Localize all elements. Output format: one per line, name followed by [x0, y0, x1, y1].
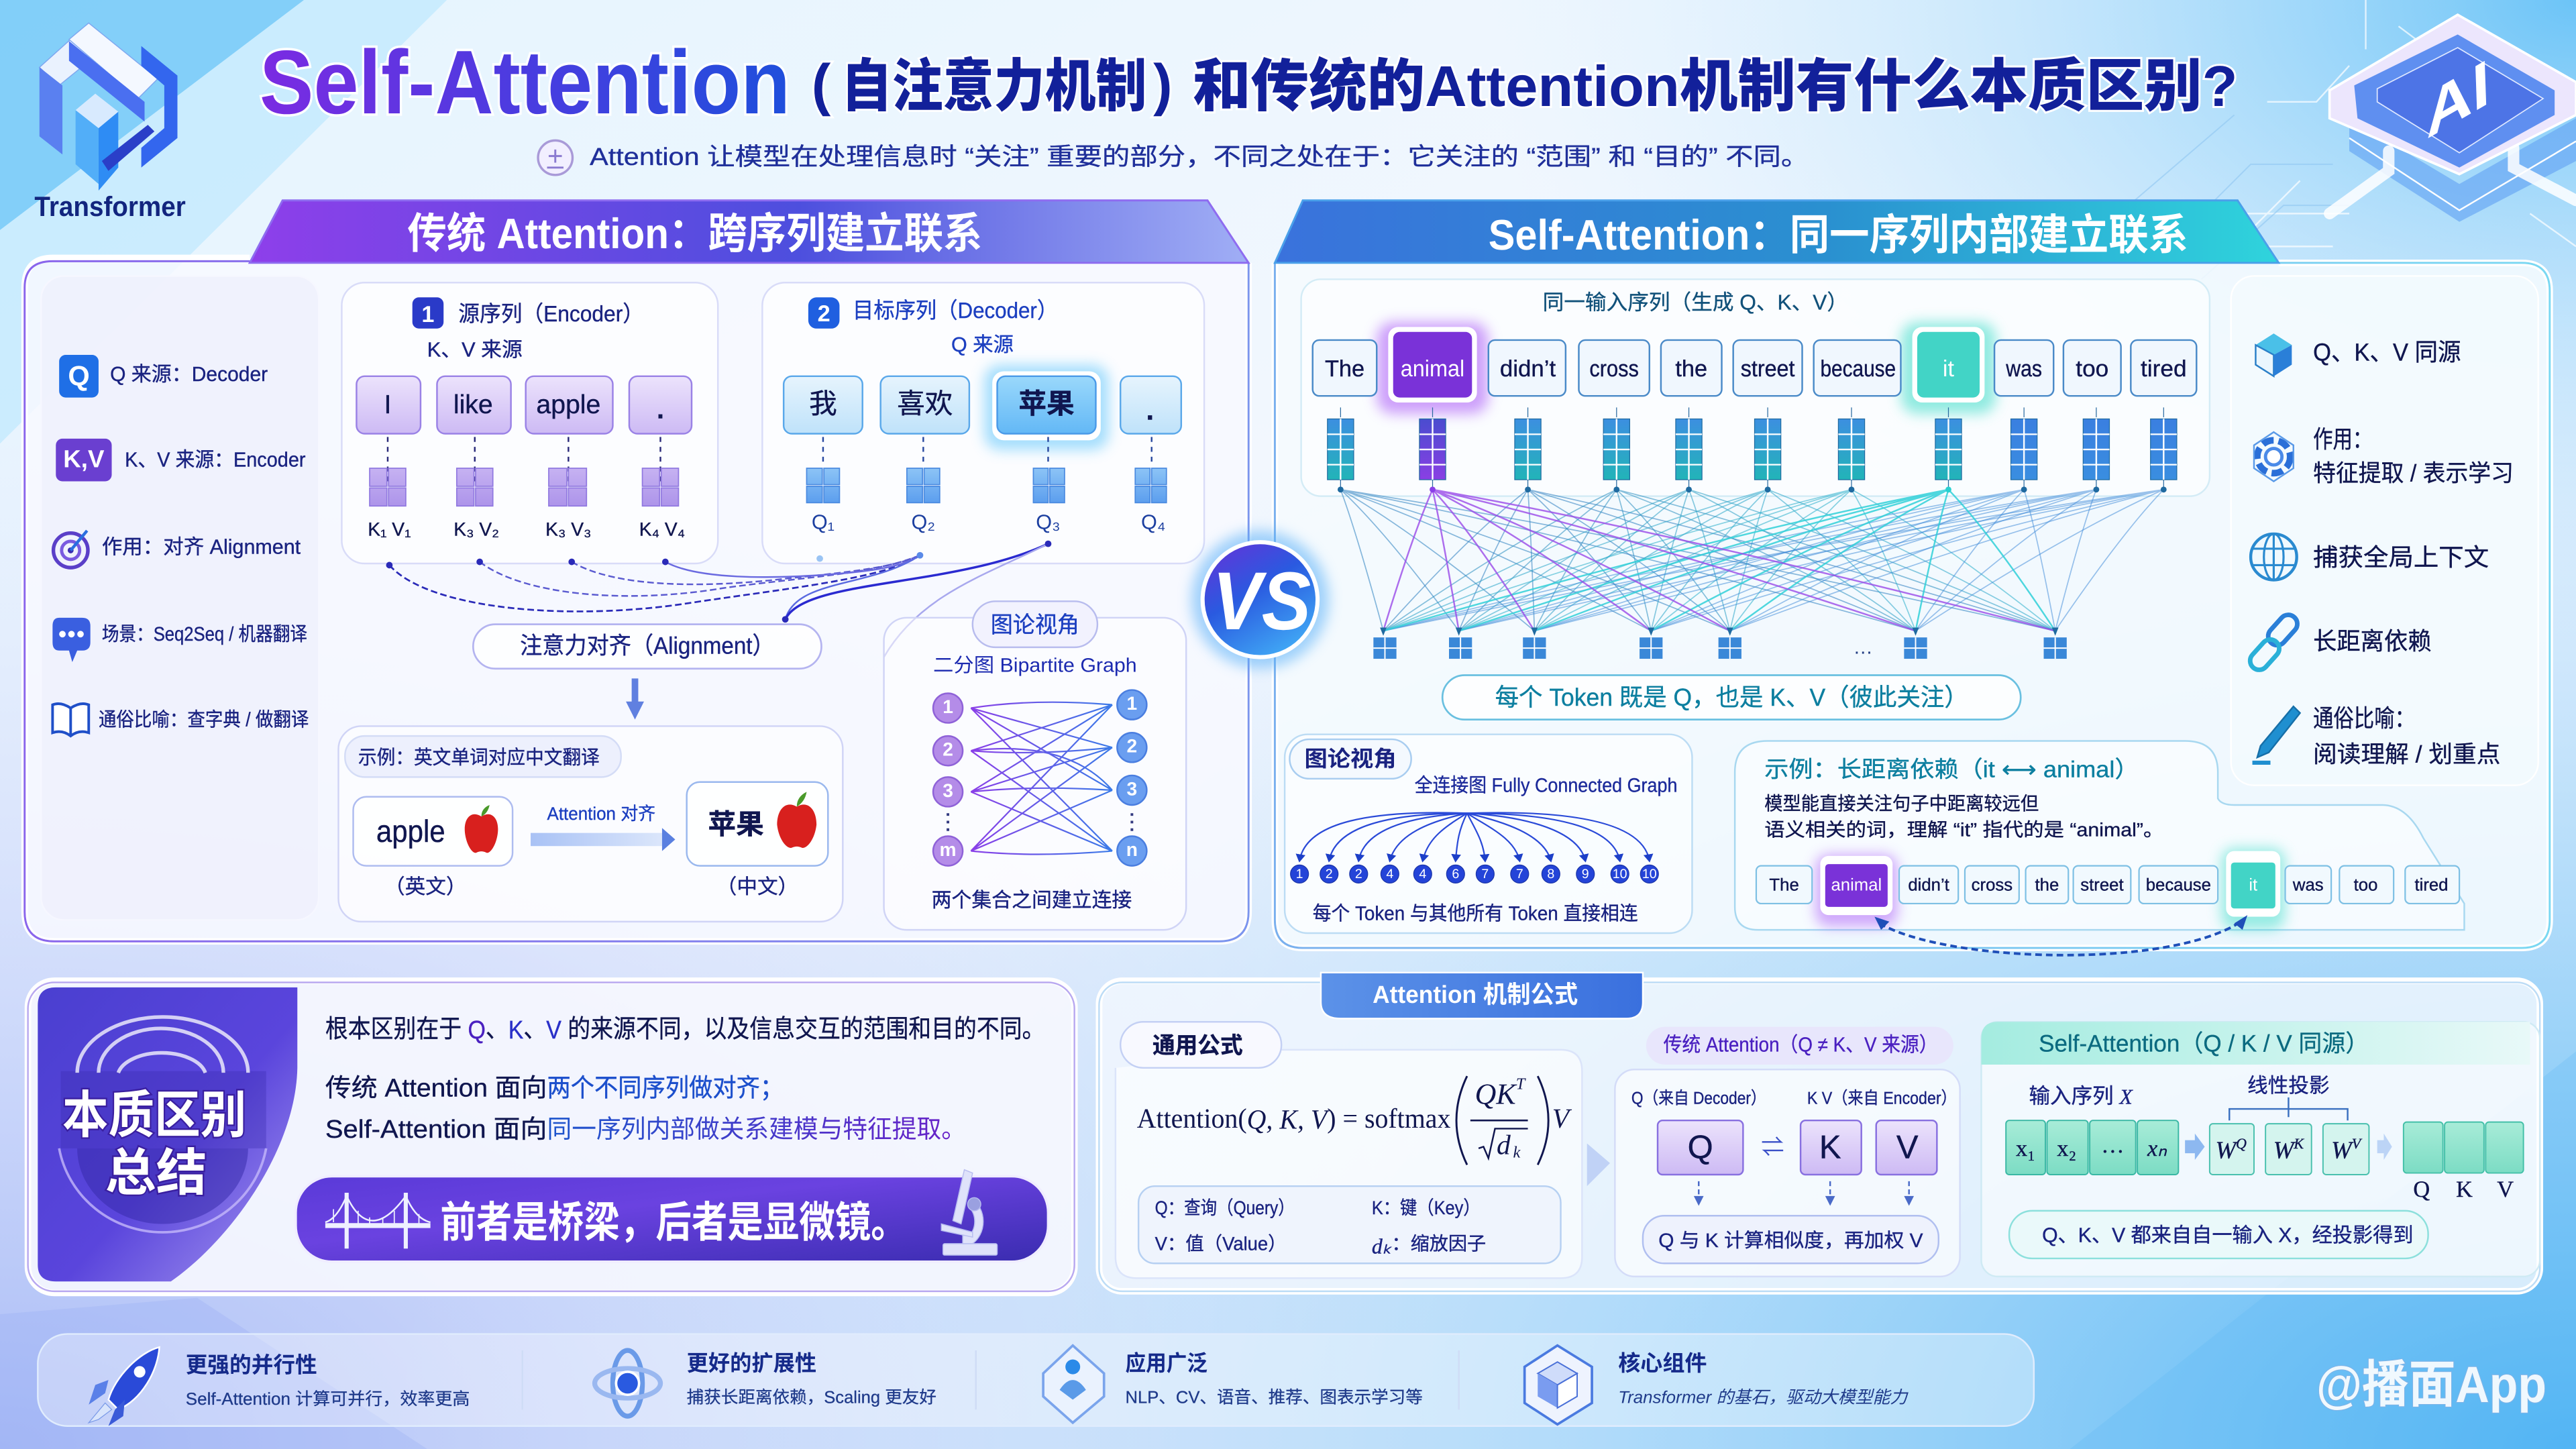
- right nodes: [1117, 690, 1146, 866]
- pill: every token: 每个 Token 既是 Q，也是 K、V（彼此关注）: [1495, 684, 1968, 712]
- target header: 目标序列（Decoder）: [853, 298, 1058, 323]
- source labels: [368, 521, 686, 541]
- banner: 前者是桥梁，后者是显微镜。: [440, 1197, 907, 1247]
- benefit: applications: [1043, 1346, 1424, 1423]
- left nodes: [933, 693, 963, 866]
- node labels: [940, 695, 1138, 861]
- numbered nodes: 7: [1516, 867, 1524, 881]
- sequence tokens: too: [2076, 355, 2109, 381]
- projection boxes: K: [2292, 1135, 2306, 1152]
- sequence tokens: The: [1325, 355, 1365, 381]
- source tokens: apple: [536, 392, 601, 420]
- target labels: Q₂: [911, 511, 936, 534]
- example tokens: The: [1769, 875, 1799, 896]
- pill: alignment: [473, 625, 821, 669]
- QKV boxes: [1658, 1120, 1937, 1175]
- arrow: formula to traditional: [1587, 1143, 1610, 1186]
- QKV boxes: ⇌: [1761, 1134, 1784, 1160]
- global context: 捕获全局上下文: [2313, 545, 2489, 572]
- sequence tokens: animal: [1401, 355, 1464, 381]
- QKV boxes: V: [1896, 1130, 1919, 1167]
- example captions: [384, 875, 798, 899]
- benefit: scalability: [595, 1350, 937, 1416]
- numbered nodes: 7: [1481, 867, 1490, 881]
- panel: fully connected graph: 全连接图 Fully Connected Graph: [1415, 773, 1677, 797]
- formula legend: Q：查询（Query）: [1155, 1197, 1295, 1219]
- source labels: K₃ V₂: [453, 521, 499, 541]
- tab: self-attention: Self-Attention：同一序列内部建立联系: [1489, 210, 2188, 260]
- panel: source sequence: [341, 282, 718, 564]
- panel: long-distance example: 示例：长距离依赖（it ⟷ animal）: [1764, 756, 2139, 782]
- source tokens: .: [657, 396, 664, 425]
- sequence tokens: cross: [1589, 355, 1639, 381]
- panel: long-distance example: 语义相关的词，理解 “it” 指代的是 “animal”。: [1764, 820, 2163, 841]
- example tokens: it: [2249, 875, 2257, 896]
- analogy: 阅读理解 / 划重点: [2313, 741, 2500, 769]
- source header: K、V 来源: [427, 338, 523, 362]
- tab: self-attention: [1275, 201, 2279, 263]
- formula legend: K：键（Key）: [1372, 1197, 1481, 1219]
- sequence tokens: street: [1741, 355, 1795, 381]
- attention arrow: [531, 804, 676, 851]
- node labels: 3: [1127, 780, 1137, 800]
- projection boxes: [2210, 1124, 2369, 1175]
- node labels: 2: [943, 741, 953, 761]
- node labels: n: [1126, 841, 1138, 861]
- role: 特征提取 / 表示学习: [2313, 460, 2514, 488]
- target tokens: 我: [809, 388, 837, 420]
- pill: graph view: [1289, 739, 1411, 779]
- dashed arrows: [1699, 1181, 1909, 1197]
- role: 作用：对齐 Alignment: [102, 535, 301, 559]
- KV source: [56, 439, 306, 482]
- panel: fully connected graph: [1285, 735, 1692, 933]
- formula legend: [1138, 1186, 1561, 1263]
- formula: V: [1552, 1103, 1574, 1134]
- source header: [413, 297, 644, 362]
- node labels: 3: [943, 782, 953, 802]
- panel: traditional formula: [1615, 1027, 1960, 1277]
- Q source: [59, 355, 268, 398]
- icon: AI chip: [2330, 15, 2576, 222]
- numbered nodes: 2: [1355, 867, 1363, 881]
- role: [54, 531, 301, 568]
- summary text: Self-Attention 面向: [325, 1115, 547, 1144]
- numbered nodes: 4: [1419, 867, 1428, 881]
- numbered nodes: [1291, 865, 1658, 883]
- tab: formula: Attention 机制公式: [1373, 981, 1578, 1010]
- watermark: @播面App: [2316, 1356, 2546, 1413]
- pill: general formula: [1120, 1022, 1281, 1068]
- arrow: alignment to example: [626, 678, 644, 720]
- node labels: 2: [1127, 738, 1137, 757]
- numbered nodes: 9: [1582, 867, 1590, 881]
- fully connected attention network: …: [1853, 636, 1873, 659]
- target tokens: [784, 365, 1181, 450]
- KV source: K、V 来源：Encoder: [125, 449, 306, 472]
- source header: 1: [421, 301, 435, 327]
- output boxes: [2404, 1122, 2524, 1203]
- panel: self-attention formula: 线性投影: [2247, 1075, 2330, 1097]
- target tokens: 苹果: [1018, 388, 1075, 420]
- pill: every token: [1442, 676, 2021, 720]
- Q source: Q: [68, 361, 90, 392]
- formula: QK: [1474, 1078, 1516, 1111]
- input boxes: xₙ: [2146, 1138, 2167, 1163]
- scenario: [52, 618, 307, 662]
- sequence tokens: was: [2004, 355, 2042, 381]
- pill: graph view: [973, 601, 1097, 647]
- summary text: 根本区别在于 Q、K、V 的来源不同，以及信息交互的范围和目的不同。: [325, 1014, 1045, 1044]
- example captions: （英文）: [384, 875, 467, 899]
- panel: traditional formula: Q（来自 Decoder）: [1631, 1089, 1766, 1109]
- numbered nodes: 2: [1326, 867, 1334, 881]
- pill: similarity: [1643, 1216, 1939, 1263]
- benefit: scalability: 捕获长距离依赖，Scaling 更友好: [687, 1388, 937, 1408]
- source tokens: I: [384, 392, 391, 420]
- benefit: parallel: Self-Attention 计算可并行，效率更高: [186, 1390, 470, 1409]
- target header: [808, 297, 1058, 356]
- input boxes: [2006, 1120, 2178, 1175]
- pill: alignment: 注意力对齐（Alignment）: [520, 633, 775, 660]
- target tokens: .: [1146, 395, 1154, 427]
- example tokens: tired: [2414, 875, 2449, 896]
- panel: self-attention: [1275, 201, 2550, 955]
- target labels: [812, 511, 1165, 534]
- output boxes: V: [2497, 1179, 2514, 1203]
- pill: traditional heading: [1646, 1027, 1953, 1065]
- KV source: K,V: [63, 446, 105, 474]
- panel: target sequence: [762, 282, 1204, 564]
- fully connected attention network: [1338, 486, 2167, 659]
- shield: summary label: [38, 987, 297, 1281]
- heading: self-attention: [1981, 1022, 2530, 1065]
- sequence tokens: [1313, 322, 2196, 414]
- output boxes: Q: [2413, 1179, 2430, 1203]
- sequence tokens: because: [1820, 355, 1896, 381]
- icon: hex cube: [1525, 1346, 1592, 1424]
- example tokens: too: [2354, 875, 2378, 896]
- token vectors: [1328, 407, 2177, 490]
- pill: same input: [2009, 1211, 2428, 1258]
- numbered nodes: 8: [1547, 867, 1556, 881]
- pill: graph view: 图论视角: [991, 611, 1079, 637]
- footer band: [38, 1334, 2034, 1426]
- pill: traditional heading: 传统 Attention（Q ≠ K、V 来源）: [1664, 1033, 1938, 1057]
- panel: input sequence: [1301, 279, 2210, 496]
- logo: Transformer: [34, 23, 186, 223]
- source labels: K₄ V₄: [639, 521, 686, 541]
- global context: [2251, 534, 2489, 580]
- title: 自注意力机制: [841, 55, 1146, 119]
- sequence tokens: didn’t: [1500, 355, 1556, 381]
- subtitle: Attention 让模型在处理信息时 “关注” 重要的部分，不同之处在于：它关注的 “范围” 和 “目的” 不同。: [590, 144, 1809, 172]
- arcs: [1299, 812, 1650, 861]
- summary text: 两个不同序列做对齐；: [547, 1073, 784, 1103]
- analogy: 通俗比喻：查字典 / 做翻译: [99, 708, 309, 731]
- projection boxes: Q: [2236, 1135, 2247, 1152]
- role: 作用：: [2313, 427, 2372, 454]
- icon: atom: [595, 1350, 660, 1416]
- QKV same source: Q、K、V 同源: [2313, 339, 2461, 367]
- target labels: Q₄: [1141, 511, 1165, 534]
- formula legend: dₖ：缩放因子: [1372, 1233, 1486, 1258]
- target header: 2: [818, 300, 830, 326]
- arrow: [2185, 1134, 2205, 1160]
- numbered nodes: 4: [1386, 867, 1395, 881]
- panel: general formula: [1116, 1022, 1582, 1278]
- bipartite edges: [971, 702, 1112, 854]
- VS badge: [1191, 531, 1329, 669]
- logo text: Transformer: [34, 191, 186, 223]
- source tokens: like: [453, 392, 493, 420]
- word apple: [354, 797, 513, 866]
- target labels: Q₁: [812, 511, 835, 534]
- example tokens: street: [2080, 875, 2124, 896]
- shield: summary label: 总结: [105, 1144, 207, 1201]
- input boxes: …: [2101, 1134, 2125, 1159]
- icon: rocket: [89, 1347, 160, 1426]
- formula: Attention(Q, K, V) = softmax: [1137, 1103, 1452, 1134]
- source tokens: [356, 376, 692, 434]
- analogy: [52, 704, 309, 736]
- banner: [296, 1170, 1048, 1262]
- summary text: 传统 Attention 面向: [325, 1073, 547, 1103]
- tab: traditional attention: [250, 201, 1248, 263]
- pill: same input: Q、K、V 都来自自一输入 X，经投影得到: [2042, 1224, 2414, 1247]
- numbered nodes: 10: [1642, 867, 1658, 881]
- long dependency: [2247, 611, 2431, 674]
- benefit: scalability: 更好的扩展性: [687, 1351, 817, 1376]
- panel: long-distance example: 模型能直接关注句子中距离较远但: [1764, 794, 2039, 815]
- panel: attention formula: [1099, 973, 2540, 1291]
- attention arrow: Attention 对齐: [547, 804, 655, 824]
- panel: fully connected graph: 每个 Token 与其他所有 Token 直接相连: [1313, 902, 1638, 925]
- source header: 源序列（Encoder）: [458, 301, 644, 326]
- numbered nodes: 10: [1613, 867, 1628, 881]
- target header: Q 来源: [951, 333, 1014, 356]
- analogy: [2253, 706, 2500, 769]
- input boxes: x₂: [2057, 1138, 2077, 1163]
- projection boxes: W: [2331, 1138, 2352, 1165]
- ellipsis dots: [948, 813, 1132, 833]
- alignment connections: [386, 541, 1051, 657]
- heading: self-attention: Self-Attention（Q / K / V 同源）: [2039, 1030, 2369, 1058]
- subtitle: [538, 140, 1809, 175]
- target query vectors: [806, 468, 1167, 502]
- title: Self-Attention: [260, 32, 790, 133]
- title: (: [812, 54, 831, 117]
- arrow: it to animal: [1874, 915, 2247, 955]
- example header: 示例：英文单词对应中文翻译: [358, 746, 600, 769]
- node labels: 1: [943, 698, 954, 718]
- summary text: 同一序列内部做关系建模与特征提取。: [547, 1115, 966, 1144]
- benefit: applications: 应用广泛: [1126, 1351, 1208, 1376]
- VS badge: VS: [1212, 555, 1311, 647]
- panel: self-attention formula: [1981, 1022, 2540, 1277]
- example tokens: [1756, 848, 2459, 930]
- numbered nodes: 6: [1452, 867, 1460, 881]
- summary text: [325, 1014, 1045, 1144]
- node labels: m: [940, 841, 957, 861]
- panel: bipartite graph: 二分图 Bipartite Graph: [933, 654, 1137, 677]
- panel: bipartite graph: [884, 601, 1186, 930]
- icon: apple: [465, 805, 498, 853]
- pill: graph view: 图论视角: [1304, 747, 1397, 771]
- output vectors: [1373, 637, 2067, 659]
- benefit: parallel: 更强的并行性: [186, 1353, 318, 1377]
- QKV same source: [2255, 333, 2461, 376]
- target labels: Q₃: [1036, 511, 1061, 534]
- shield: summary label: 本质区别: [62, 1087, 246, 1144]
- example captions: （中文）: [716, 875, 798, 899]
- projection boxes: V: [2352, 1135, 2363, 1152]
- icon: person diamond: [1043, 1346, 1104, 1423]
- benefit: parallel: [89, 1347, 470, 1426]
- example header: [345, 736, 621, 777]
- target connectors: [823, 437, 1152, 467]
- scenario: 场景：Seq2Seq / 机器翻译: [102, 623, 307, 645]
- source labels: K₃ V₃: [545, 521, 592, 541]
- benefit: applications: NLP、CV、语音、推荐、图表示学习等: [1126, 1388, 1424, 1408]
- projection boxes: W: [2273, 1138, 2294, 1165]
- Q source: Q 来源：Decoder: [110, 363, 268, 386]
- icon: AI chip: AI: [2424, 44, 2491, 153]
- bracket: [2229, 1097, 2348, 1120]
- icon: bridge: [325, 1193, 431, 1248]
- analogy: 通俗比喻：: [2313, 706, 2415, 733]
- panel: traditional attention: [25, 201, 1248, 941]
- arrow: [2377, 1134, 2392, 1160]
- sidebar: traditional attention properties: [41, 276, 319, 920]
- example tokens: the: [2035, 875, 2059, 896]
- sequence tokens: tired: [2141, 355, 2187, 381]
- word 苹果: [687, 782, 828, 866]
- role: [2254, 427, 2514, 488]
- title: 和传统的Attention机制有什么本质区别?: [1193, 55, 2238, 119]
- QKV boxes: K: [1819, 1130, 1842, 1167]
- tab: formula: [1321, 973, 1643, 1018]
- example tokens: animal: [1831, 875, 1882, 896]
- pill: similarity: Q 与 K 计算相似度，再加权 V: [1658, 1229, 1923, 1252]
- panel: long-distance example: [1735, 741, 2464, 955]
- example tokens: cross: [1972, 875, 2012, 896]
- word apple: apple: [376, 816, 445, 850]
- panel: example translation: [338, 726, 843, 922]
- title: [260, 32, 2238, 133]
- source connectors: [388, 437, 660, 486]
- benefit: core component: [1525, 1346, 1910, 1424]
- arrow heads: [1694, 1196, 1914, 1206]
- formula: [1137, 1075, 1574, 1165]
- input boxes: x₁: [2016, 1138, 2035, 1163]
- benefit: core component: 核心组件: [1618, 1351, 1708, 1376]
- pill: general formula: 通用公式: [1152, 1032, 1243, 1058]
- panel: input sequence: 同一输入序列（生成 Q、K、V）: [1543, 290, 1848, 315]
- tab: traditional attention: 传统 Attention：跨序列建立联系: [407, 209, 982, 258]
- long dependency: 长距离依赖: [2313, 629, 2431, 656]
- icon: apple: [777, 792, 816, 848]
- example tokens: was: [2291, 875, 2324, 896]
- source key value vectors: [370, 468, 678, 506]
- source labels: K₁ V₁: [368, 521, 411, 541]
- target tokens: 喜欢: [897, 388, 953, 420]
- formula: k: [1513, 1144, 1521, 1163]
- numbered nodes: 1: [1296, 867, 1304, 881]
- benefit: core component: Transformer 的基石，驱动大模型能力: [1618, 1388, 1910, 1408]
- panel: bipartite graph: 两个集合之间建立连接: [932, 889, 1133, 912]
- QKV boxes: Q: [1688, 1130, 1713, 1167]
- formula: d: [1497, 1130, 1511, 1161]
- output boxes: K: [2456, 1179, 2473, 1203]
- sequence tokens: it: [1943, 355, 1954, 381]
- node labels: 1: [1127, 695, 1138, 714]
- formula legend: V：值（Value）: [1155, 1234, 1287, 1255]
- example tokens: because: [2146, 875, 2211, 896]
- word 苹果: 苹果: [708, 809, 764, 841]
- panel: summary: [28, 981, 1075, 1293]
- title: ): [1153, 54, 1173, 117]
- panel: traditional formula: K V（来自 Encoder）: [1807, 1089, 1957, 1109]
- example tokens: didn’t: [1908, 875, 1949, 896]
- panel: self-attention formula: 输入序列 X: [2029, 1083, 2134, 1108]
- sequence tokens: the: [1675, 355, 1708, 381]
- sidebar: self-attention properties: [2231, 276, 2538, 786]
- formula: T: [1516, 1075, 1527, 1093]
- projection boxes: W: [2215, 1138, 2236, 1165]
- icon: microscope: [941, 1170, 998, 1255]
